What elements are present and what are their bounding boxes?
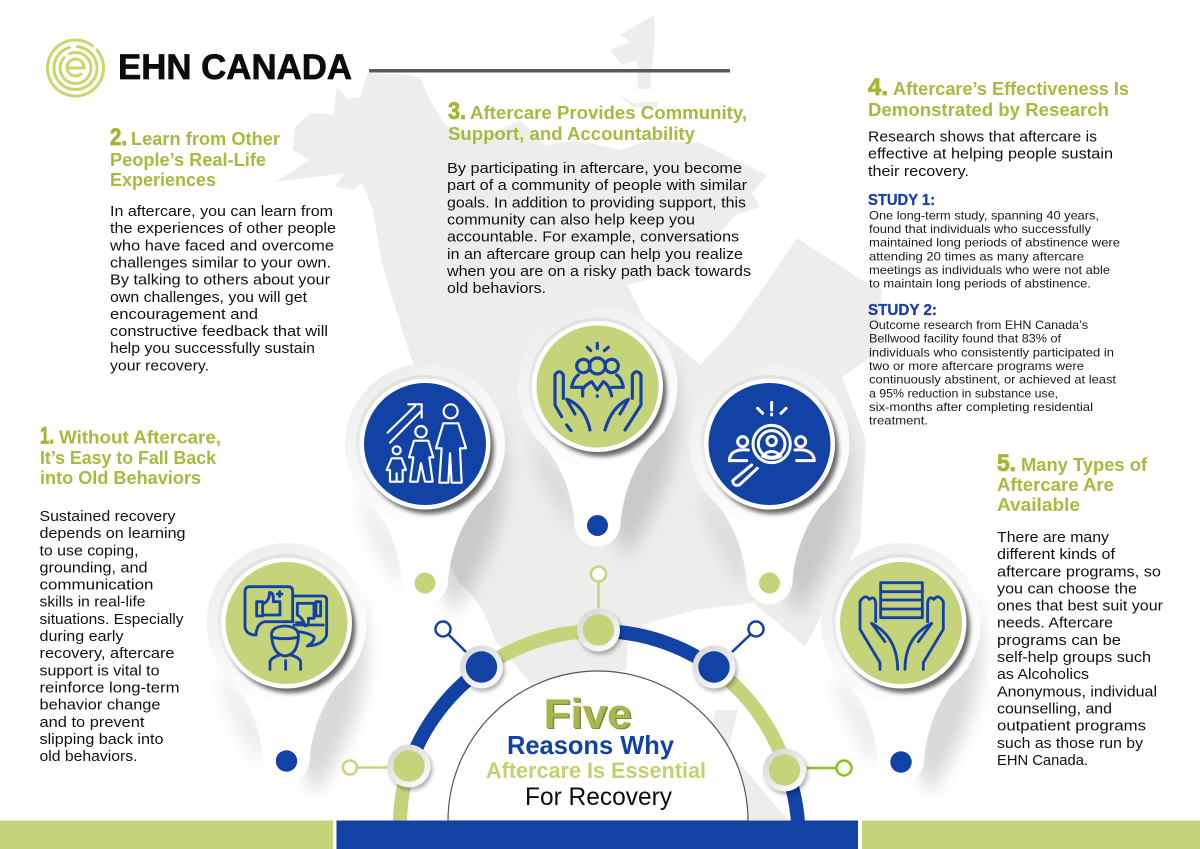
body text: section 2: In aftercare, you can learn from	[110, 203, 333, 220]
body text: section 4: their recovery.	[868, 163, 969, 180]
dot: pin 2	[414, 572, 436, 594]
title: Reasons Why	[507, 730, 675, 760]
study 2: Outcome research from EHN Canada’s	[869, 318, 1088, 332]
heading: section 3: Support, and Accountability	[448, 123, 696, 144]
dot: pin 1	[276, 750, 297, 772]
body text: section 5: self-help groups such	[997, 649, 1151, 666]
body text: section 1: recovery, aftercare	[40, 645, 174, 662]
panel: section 1 text	[40, 422, 221, 765]
heading: section 2: Learn from Other	[131, 128, 280, 149]
heading: section 1: 1.	[40, 422, 54, 450]
body text: section 4: Research shows that aftercare is	[868, 128, 1097, 146]
pin 4: blue research search	[690, 364, 850, 616]
body text: section 2: your recovery.	[110, 357, 209, 374]
icon: hands holding group	[555, 343, 641, 431]
dot: pin 4	[759, 572, 780, 594]
icon: magnifying glass over people	[729, 402, 814, 485]
study 2	[868, 302, 1117, 428]
heading: section 1	[40, 422, 221, 488]
study 2: Bellwood facility found that 83% of	[869, 332, 1062, 346]
study 2: individuals who consistently participated in	[869, 345, 1114, 359]
body text: section 1: and to prevent	[40, 714, 145, 731]
heading: section 5	[997, 450, 1148, 515]
study 1: attending 20 times as many aftercare	[869, 249, 1084, 263]
body text: section 5: Anonymous, individual	[997, 683, 1157, 700]
node: top	[577, 608, 622, 654]
logo wordmark: EHN CANADA	[118, 48, 352, 87]
heading: section 3: Aftercare Provides Community,	[470, 102, 747, 123]
heading: section 5: Aftercare Are	[997, 474, 1114, 495]
footer bars	[0, 820, 1200, 849]
study 2: treatment.	[869, 414, 928, 428]
body text: section 5: programs can be	[997, 632, 1121, 649]
body text: section 1: grounding, and	[40, 559, 148, 576]
body text: section 5: There are many	[997, 529, 1110, 546]
arc timeline	[343, 566, 852, 822]
body text: section 5: different kinds of	[997, 546, 1116, 563]
connector stalks	[343, 566, 852, 776]
body text: section 1: support is vital to	[40, 662, 160, 679]
body text: section 2: the experiences of other people	[110, 220, 336, 237]
heading: section 4: 4.	[868, 74, 888, 101]
body text: section 3: community can also help keep you	[447, 212, 695, 228]
study 2: a 95% reduction in substance use,	[869, 386, 1058, 400]
heading: section 5: Many Types of	[1021, 454, 1148, 475]
body text: section 3: part of a community of people with similar	[447, 177, 747, 194]
body text: section 1: behavior change	[40, 697, 160, 714]
body text: section 4: effective at helping people sustain	[868, 146, 1113, 163]
study 1: found that individuals who successfully	[869, 222, 1091, 236]
title dome	[448, 671, 748, 821]
heading: section 1: into Old Behaviors	[40, 467, 201, 488]
body text: section 2: encouragement and	[110, 306, 258, 323]
body text: section 5: as Alcoholics	[997, 666, 1089, 683]
panel: section 4 text	[868, 74, 1129, 428]
body text: section 1: Sustained recovery	[40, 508, 176, 525]
body text: section 3	[446, 160, 751, 297]
body text: section 5: you can choose the	[997, 580, 1137, 597]
body text: section 2: who have faced and overcome	[109, 237, 334, 254]
study 2: STUDY 2:	[868, 302, 937, 319]
heading: section 2: 2.	[110, 124, 127, 151]
title: Five	[544, 690, 632, 737]
study 2: continuously abstinent, or achieved at least	[869, 373, 1117, 387]
heading: section 3	[448, 98, 747, 144]
body text: section 3: in an aftercare group can help you realize	[447, 246, 743, 263]
body text: section 4	[868, 128, 1113, 180]
icon: hands holding stack	[860, 583, 943, 669]
logo: EHN Canada	[48, 40, 352, 96]
body text: section 1: old behaviors.	[40, 748, 138, 765]
title: Five	[545, 691, 633, 738]
header rule	[369, 69, 730, 72]
body text: section 5	[997, 529, 1163, 769]
study 1	[868, 192, 1120, 291]
body text: section 5: counselling, and	[997, 700, 1112, 718]
heading: section 3: 3.	[448, 98, 466, 125]
pin 1: green feedback	[206, 543, 367, 795]
study 1: meetings as individuals who were not able	[869, 263, 1110, 277]
heading: section 4	[868, 74, 1129, 120]
node: upper left	[460, 646, 505, 692]
icon: person with thumbs up and down	[245, 587, 327, 669]
study 2: two or more aftercare programs were	[869, 359, 1084, 373]
title	[486, 690, 706, 811]
heading: section 2: Experiences	[110, 169, 216, 190]
study 1: STUDY 1:	[868, 192, 935, 209]
dot: pin 5	[890, 751, 912, 773]
pin 3: green community	[518, 306, 678, 558]
body text: section 5: outpatient programs	[997, 718, 1146, 735]
heading: section 5: Available	[997, 494, 1080, 515]
icon: family with arrow	[387, 404, 466, 483]
title: Aftercare Is Essential	[486, 758, 706, 783]
background map of Canada	[275, 15, 882, 820]
study 1: maintained long periods of abstinence were	[869, 236, 1120, 250]
body text: section 2	[109, 203, 336, 374]
body text: section 3: accountable. For example, conversations	[447, 229, 739, 246]
panel: section 2 text	[109, 124, 336, 374]
body text: section 5: needs. Aftercare	[997, 615, 1113, 632]
heading: section 2	[110, 124, 280, 190]
study 2: six-months after completing residential	[869, 400, 1093, 414]
body text: section 1: during early	[40, 628, 124, 645]
body text: section 1: slipping back into	[40, 731, 164, 748]
body text: section 1: communication	[40, 577, 154, 594]
heading: section 2: People’s Real-Life	[110, 149, 266, 170]
panel: section 3 text	[446, 98, 751, 297]
body text: section 1	[40, 508, 186, 765]
heading: section 1: It’s Easy to Fall Back	[40, 447, 217, 468]
node: far right	[763, 748, 808, 794]
study 1: to maintain long periods of abstinence.	[869, 277, 1091, 291]
node: far left	[388, 744, 432, 790]
body text: section 5: ones that best suit your	[997, 598, 1163, 615]
pin 2: blue people growth	[345, 364, 505, 616]
body text: section 1: depends on learning	[40, 525, 186, 542]
heading: section 5: 5.	[997, 450, 1016, 477]
node: upper right	[692, 646, 738, 692]
arc segments	[400, 631, 798, 822]
pin 5: green books	[821, 543, 981, 795]
panel: section 5 text	[997, 450, 1163, 769]
body text: section 5: aftercare programs, so	[997, 563, 1161, 580]
body text: section 2: By talking to others about your	[110, 272, 330, 289]
heading: section 1: Without Aftercare,	[59, 426, 221, 448]
body text: section 3: goals. In addition to providing support, this	[447, 194, 746, 211]
heading: section 4: Demonstrated by Research	[868, 99, 1109, 120]
body text: section 2: constructive feedback that will	[110, 323, 328, 340]
body text: section 1: reinforce long-term	[40, 680, 180, 696]
study 1: One long-term study, spanning 40 years,	[869, 208, 1099, 222]
body text: section 1: to use coping,	[40, 542, 138, 559]
body text: section 1: situations. Especially	[40, 611, 184, 628]
body text: section 5: such as those run by	[997, 735, 1144, 752]
body text: section 3: By participating in aftercare, you become	[447, 160, 742, 177]
icon: logo rings	[48, 40, 104, 96]
body text: section 2: challenges similar to your own.	[110, 254, 331, 272]
body text: section 3: when you are on a risky path back towards	[446, 263, 751, 280]
body text: section 2: own challenges, you will get	[110, 289, 308, 306]
body text: section 1: skills in real-life	[40, 594, 146, 611]
body text: section 5: EHN Canada.	[997, 752, 1088, 769]
body text: section 2: help you successfully sustain	[110, 340, 315, 357]
heading: section 4: Aftercare’s Effectiveness Is	[893, 78, 1129, 99]
body text: section 3: old behaviors.	[447, 280, 546, 297]
title: For Recovery	[525, 783, 672, 811]
dot: pin 3	[587, 515, 608, 536]
